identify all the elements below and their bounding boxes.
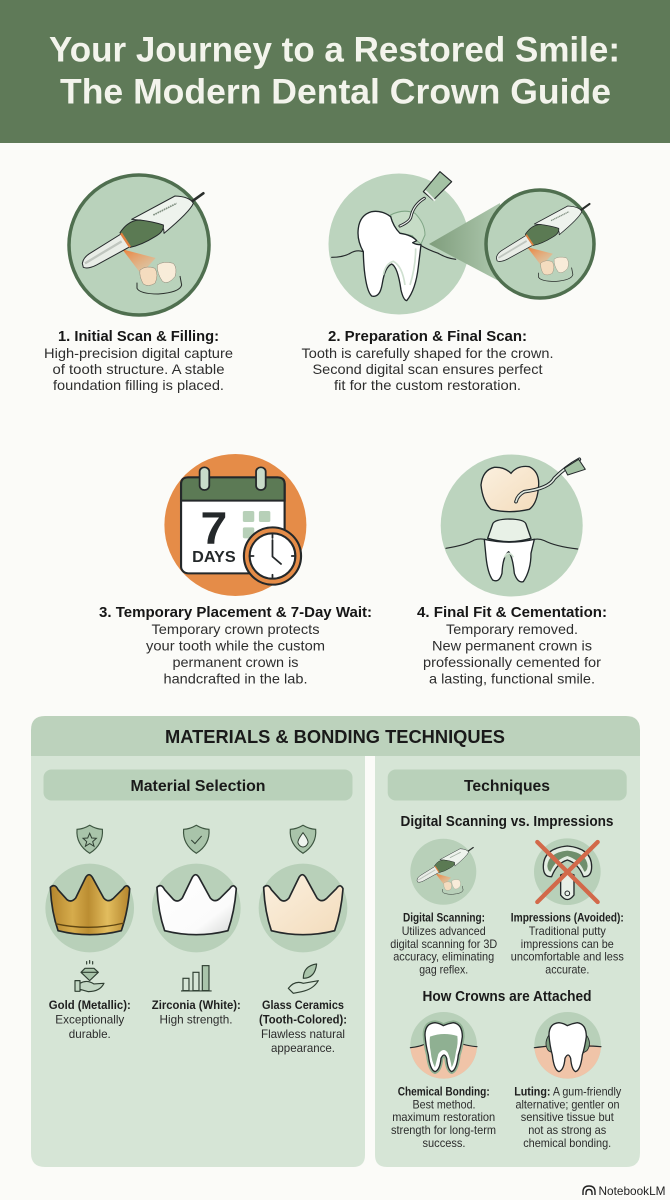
step 1 text <box>44 328 233 393</box>
how crowns are attached heading: How Crowns are Attached <box>422 989 592 1005</box>
step 3 text: your tooth while the custom <box>146 638 325 654</box>
glass ceramics text: Flawless natural <box>261 1027 345 1041</box>
icon: drop shield <box>290 825 316 853</box>
icon: luting tooth <box>532 1012 602 1080</box>
luting text: Luting: A gum-friendly <box>514 1085 621 1099</box>
step 4 text: a lasting, functional smile. <box>429 670 595 686</box>
step 4 text: professionally cemented for <box>423 654 601 670</box>
step 3 text: 3. Temporary Placement & 7-Day Wait: <box>99 604 372 621</box>
step 4 text: New permanent crown is <box>432 638 592 654</box>
digital scanning text: accuracy, eliminating <box>393 950 494 964</box>
impressions text: impressions can be <box>521 937 614 951</box>
impressions text <box>511 910 624 976</box>
chemical bonding text: strength for long-term <box>391 1123 496 1137</box>
impressions text: accurate. <box>545 962 589 976</box>
digital scanning text <box>390 910 498 976</box>
step 3 icon: calendar and clock <box>164 454 306 596</box>
step 1 text: High-precision digital capture <box>44 345 233 361</box>
chemical bonding text: Chemical Bonding: <box>398 1085 490 1099</box>
material selection heading <box>44 770 352 800</box>
glass ceramics text: appearance. <box>271 1041 335 1055</box>
gold text: Gold (Metallic): <box>49 998 131 1012</box>
chemical bonding text: maximum restoration <box>392 1110 495 1124</box>
digital scanning vs impressions heading: Digital Scanning vs. Impressions <box>400 814 614 830</box>
title <box>49 30 620 112</box>
icon: leaf in hand <box>288 964 318 993</box>
icon: impressions crossed out <box>534 838 601 905</box>
zirconia text: High strength. <box>160 1012 232 1026</box>
step 1 text: 1. Initial Scan & Filling: <box>58 328 219 345</box>
impressions text: uncomfortable and less <box>511 950 624 964</box>
zirconia text: Zirconia (White): <box>152 998 241 1012</box>
digital scanning text: gag reflex. <box>419 962 468 976</box>
material selection heading: Material Selection <box>130 778 266 795</box>
panel: techniques <box>375 756 640 1167</box>
step 3 icon: calendar and clock: DAYS <box>192 549 236 566</box>
step 2 text: Tooth is carefully shaped for the crown. <box>302 345 554 361</box>
step 1 text: foundation filling is placed. <box>53 377 224 393</box>
step 3 text <box>99 604 372 686</box>
step 4 text: Temporary removed. <box>446 621 578 637</box>
icon: check shield <box>184 825 209 853</box>
icon: star shield <box>77 825 102 853</box>
icon: digital scanning <box>410 839 476 905</box>
step 2 text: Second digital scan ensures perfect <box>312 361 543 377</box>
icon: bar chart <box>181 966 212 991</box>
gold text: durable. <box>69 1027 111 1041</box>
glass ceramics text <box>259 998 347 1055</box>
step 3 text: handcrafted in the lab. <box>164 670 308 686</box>
section heading: MATERIALS & BONDING TECHNIQUES <box>165 726 505 747</box>
gold text: Exceptionally <box>55 1012 124 1026</box>
step 4 icon: crown cementation <box>441 454 585 596</box>
chemical bonding text: Best method. <box>412 1098 476 1112</box>
step 3 text: Temporary crown protects <box>152 621 320 637</box>
icon: diamond in hand <box>75 961 104 992</box>
luting text <box>514 1085 621 1150</box>
title: The Modern Dental Crown Guide <box>60 72 611 112</box>
glass ceramics text: (Tooth-Colored): <box>259 1012 347 1026</box>
zirconia text <box>152 998 241 1026</box>
techniques heading: Techniques <box>464 778 550 795</box>
glass ceramics text: Glass Ceramics <box>262 998 344 1012</box>
gold crown <box>45 864 134 952</box>
digital scanning text: digital scanning for 3D <box>390 937 498 951</box>
chemical bonding text: success. <box>422 1136 466 1150</box>
luting text: chemical bonding. <box>523 1136 611 1150</box>
luting text: not as strong as <box>528 1123 606 1137</box>
step 1 icon: scanner circle <box>69 175 209 315</box>
impressions text: Traditional putty <box>529 924 606 938</box>
zirconia crown <box>152 864 241 952</box>
step 2 icon: tooth preparation with scan inset <box>328 172 594 314</box>
glass ceramic crown <box>259 864 347 952</box>
section header band <box>31 716 640 756</box>
step 3 text: permanent crown is <box>172 654 298 670</box>
step 2 text: fit for the custom restoration. <box>334 377 521 393</box>
icon: chemical bonding tooth <box>408 1012 478 1080</box>
luting text: sensitive tissue but <box>521 1110 614 1124</box>
digital scanning text: Digital Scanning: <box>403 910 485 924</box>
techniques heading <box>388 770 627 800</box>
step 2 text <box>302 328 554 393</box>
step 3 icon: calendar and clock: 7 <box>201 503 227 553</box>
step 1 text: of tooth structure. A stable <box>52 361 225 377</box>
impressions text: Impressions (Avoided): <box>511 910 624 924</box>
step 4 text: 4. Final Fit & Cementation: <box>417 604 607 621</box>
digital scanning text: Utilizes advanced <box>402 924 486 938</box>
panel: material selection <box>31 756 365 1167</box>
step 4 text <box>417 604 607 686</box>
notebooklm mark: NotebookLM <box>598 1184 666 1198</box>
chemical bonding text <box>391 1085 496 1150</box>
luting text: alternative; gentler on <box>516 1098 620 1112</box>
gold text <box>49 998 131 1041</box>
step 2 text: 2. Preparation & Final Scan: <box>328 328 527 345</box>
header band <box>0 0 670 143</box>
title: Your Journey to a Restored Smile: <box>49 30 620 70</box>
